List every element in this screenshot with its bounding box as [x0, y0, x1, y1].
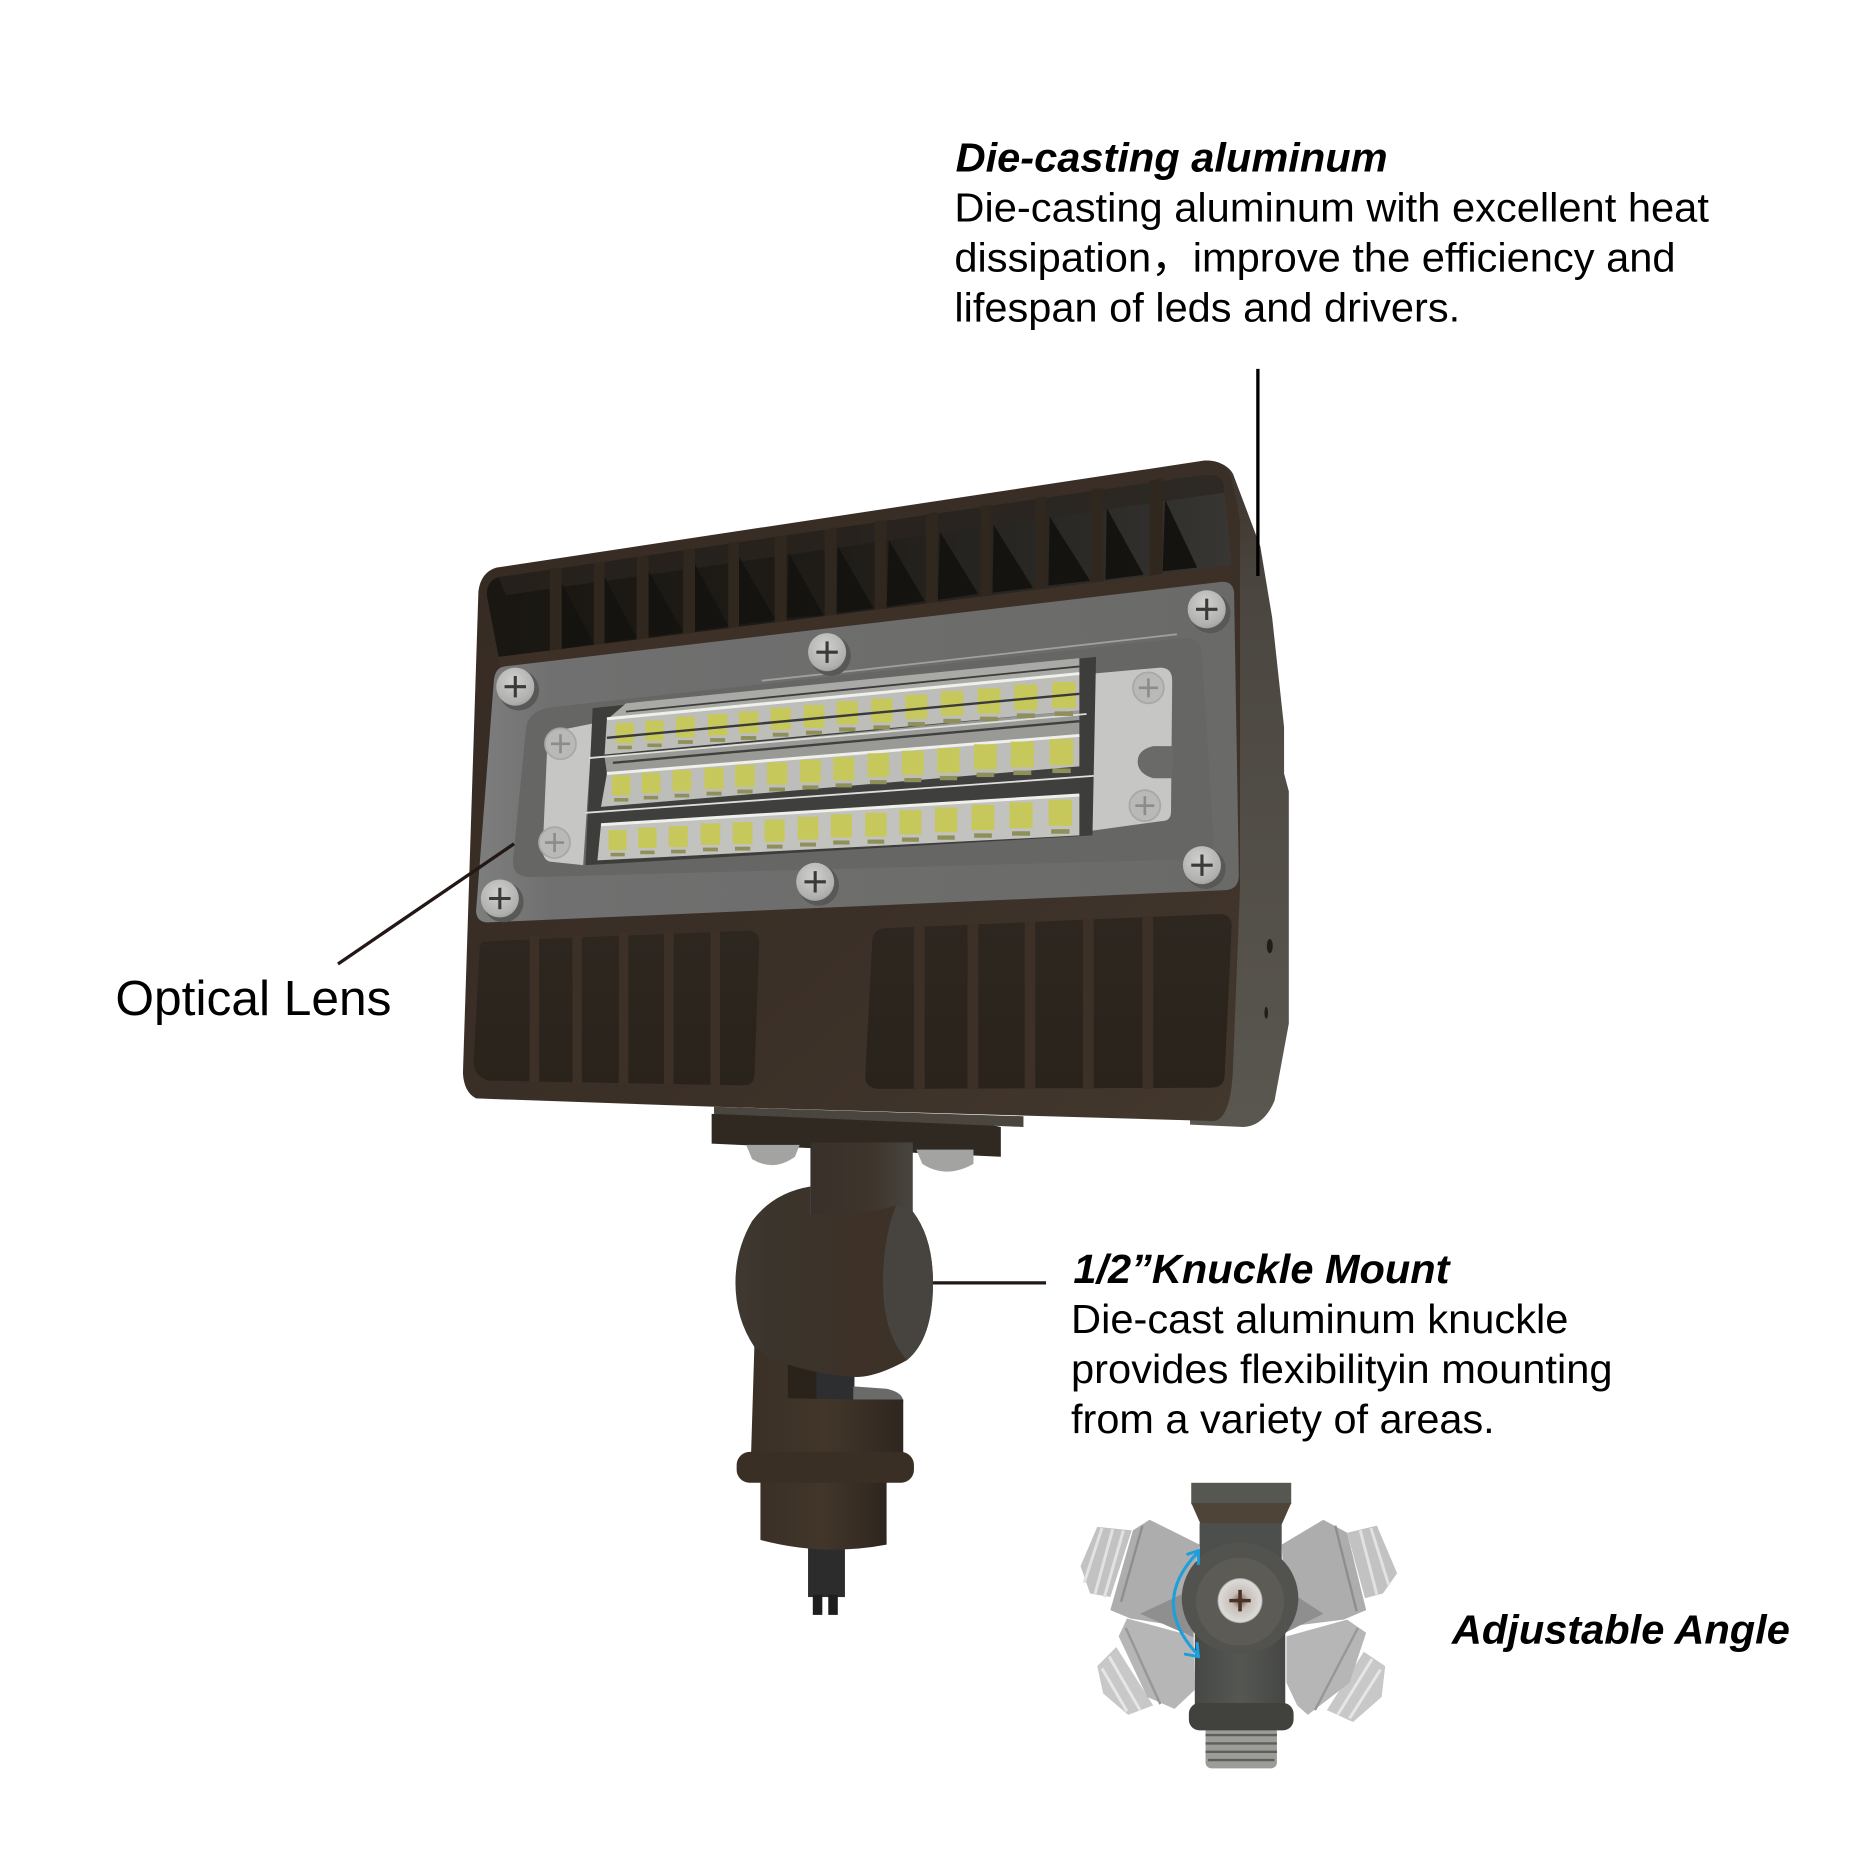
callout line: die-casting	[1256, 369, 1259, 576]
knuckle stem	[1200, 1523, 1282, 1571]
lower right fin recess	[865, 914, 1232, 1089]
flood light	[463, 460, 1289, 1615]
strip separators	[586, 714, 1094, 813]
mount screw left	[746, 1145, 800, 1165]
lower left fin recess	[474, 931, 759, 1085]
lower knuckle block	[751, 1342, 903, 1459]
lens highlight	[762, 634, 1177, 681]
callout line: knuckle mount	[933, 1281, 1046, 1284]
ghost arm upper left	[1081, 1520, 1200, 1627]
ghost arm lower left	[1097, 1618, 1195, 1715]
mount screw right	[916, 1150, 973, 1172]
ghost centre wedges	[1140, 1589, 1323, 1638]
label: adjustable angle: Adjustable Angle	[1451, 1606, 1790, 1652]
terminal	[808, 1547, 845, 1615]
LED strip 1	[605, 674, 1079, 754]
body line 3: from a variety of areas.	[1071, 1396, 1495, 1442]
text block: die-casting aluminum	[954, 134, 1710, 330]
knuckle ball	[735, 1186, 933, 1377]
knuckle end cap	[883, 1206, 933, 1360]
top fin recess	[487, 475, 1232, 657]
strip upper face 2	[605, 710, 1079, 774]
lens screws	[481, 590, 1231, 922]
LED window	[586, 657, 1096, 865]
icon: adjustable knuckle detail	[1173, 1483, 1298, 1768]
text block: knuckle mount	[1071, 1246, 1613, 1442]
body line 1: Die-casting aluminum with excellent heat	[954, 184, 1710, 230]
ghost arm lower right	[1286, 1620, 1385, 1722]
brown band below fins	[499, 565, 1233, 666]
body line 2: provides flexibilityin mounting	[1071, 1346, 1613, 1392]
plate notch	[1138, 746, 1173, 778]
housing side	[1190, 461, 1289, 1127]
panel: lens	[476, 582, 1239, 922]
knuckle lower stem	[1195, 1633, 1285, 1711]
ghost arm upper right	[1282, 1520, 1397, 1627]
knuckle ball inner	[1196, 1558, 1284, 1646]
lower stem	[760, 1476, 887, 1550]
knuckle screw	[1217, 1578, 1263, 1623]
strip upper face 3	[601, 766, 1079, 825]
body line 3: lifespan of leds and drivers.	[954, 284, 1460, 330]
label: optical lens: Optical Lens	[115, 972, 392, 1026]
ghost knuckle positions	[1081, 1520, 1397, 1722]
collar	[737, 1452, 914, 1483]
body line 1: Die-cast aluminum knuckle	[1071, 1296, 1568, 1342]
top stem	[810, 1142, 913, 1221]
notch shadow	[785, 1342, 821, 1402]
recess upper shade	[499, 475, 1225, 595]
mount plate	[712, 1107, 1023, 1157]
pin	[816, 1369, 854, 1402]
fin shadow triangles	[562, 500, 1197, 649]
lens body	[476, 582, 1239, 922]
heading: knuckle mount: 1/2”Knuckle Mount	[1073, 1246, 1452, 1292]
left mounting plate	[543, 724, 593, 865]
LED strip 3	[597, 795, 1079, 860]
housing front	[463, 460, 1240, 1121]
knuckle collar	[1189, 1703, 1294, 1730]
knuckle ball	[1182, 1542, 1298, 1654]
callout line: optical lens	[338, 844, 514, 964]
knuckle top bar	[1191, 1483, 1291, 1524]
lower knuckle top face	[853, 1386, 903, 1402]
icon: blue rotation arrow	[1173, 1551, 1198, 1657]
strip upper face 1	[608, 658, 1079, 719]
heat sink fins	[550, 478, 1197, 651]
heading: die-casting aluminum: Die-casting aluminum	[956, 134, 1388, 180]
right mounting plate	[1092, 668, 1172, 831]
lens inner frame	[513, 638, 1214, 877]
plate screws	[539, 672, 1164, 858]
body line 2: dissipation，improve the efficiency and	[954, 234, 1676, 280]
LED strip 2	[601, 735, 1079, 807]
knuckle thread	[1206, 1726, 1277, 1768]
side holes	[1264, 939, 1273, 1019]
